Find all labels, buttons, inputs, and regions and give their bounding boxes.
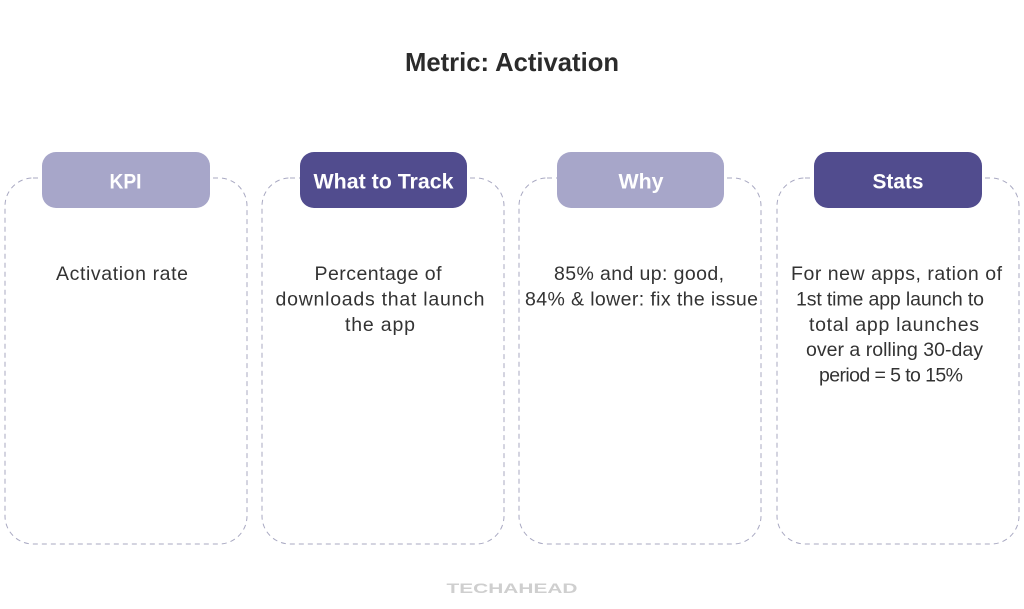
text: Why body xyxy=(525,263,758,310)
text: What to Track body: downloads that launch xyxy=(276,288,484,310)
heading: Stats: Stats xyxy=(872,170,924,194)
text: Why body: 85% and up: good, xyxy=(554,263,724,285)
text: Stats body: total app launches xyxy=(809,314,979,336)
text: What to Track body: the app xyxy=(345,314,415,336)
logo: TechAhead wordmark: TECHAHEAD xyxy=(446,580,578,596)
title: Metric: Activation xyxy=(405,47,619,77)
text: Stats body: period = 5 to 15% xyxy=(819,364,963,386)
heading: Stats xyxy=(814,152,982,208)
text: Stats body: For new apps, ration of xyxy=(791,263,1003,285)
heading: KPI xyxy=(42,152,210,208)
text: What to Track body: Percentage of xyxy=(314,263,442,285)
heading: Why: Why xyxy=(618,170,664,194)
panel: KPI xyxy=(5,152,247,544)
text: Stats body: 1st time app launch to xyxy=(796,288,984,310)
heading: What to Track: What to Track xyxy=(314,170,454,194)
panel: What to Track xyxy=(262,152,504,544)
text: Stats body: over a rolling 30-day xyxy=(806,339,983,361)
panel: Stats xyxy=(777,152,1019,544)
panel: Why xyxy=(519,152,761,544)
heading: Why xyxy=(557,152,724,208)
text: What to Track body xyxy=(276,263,484,336)
text: KPI body: Activation rate xyxy=(56,263,188,285)
heading: KPI: KPI xyxy=(110,170,142,194)
text: Why body: 84% & lower: fix the issue xyxy=(525,288,758,310)
text: Stats body xyxy=(791,263,1003,386)
heading: What to Track xyxy=(300,152,467,208)
